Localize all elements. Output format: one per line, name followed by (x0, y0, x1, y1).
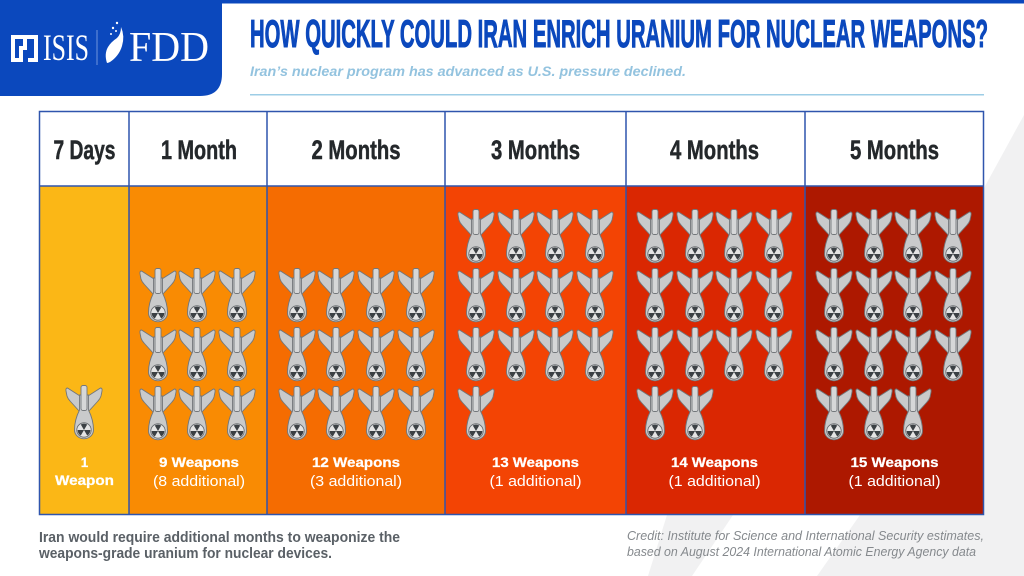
credit: Credit: Institute for Science and International Security estimates, (627, 529, 984, 543)
bombs: 13 weapons (458, 210, 613, 440)
header: 3 Months: 3 Months (491, 135, 580, 165)
bombs: 15 weapons (816, 210, 971, 440)
column: 1 Month (129, 111, 267, 515)
label: 15 Weapons (848, 455, 940, 490)
top rule (0, 0, 1024, 4)
label: 9 Weapons: (8 additional) (153, 474, 245, 490)
header: 5 Months: 5 Months (850, 135, 939, 165)
label: 15 Weapons: (1 additional) (848, 474, 940, 490)
logo: FDD: FDD (129, 25, 209, 71)
column: 7 Days (39, 111, 129, 515)
column: 2 Months (267, 111, 445, 515)
header: 7 Days: 7 Days (54, 135, 116, 165)
label: 1 Weapon: Weapon (55, 473, 114, 488)
label: 1 Weapon (55, 455, 114, 488)
footnote: weapons-grade uranium for nuclear devices. (38, 545, 332, 562)
label: 15 Weapons: 15 Weapons (850, 455, 938, 470)
label: 14 Weapons (668, 455, 760, 490)
label: 12 Weapons (310, 455, 402, 490)
label: 14 Weapons: (1 additional) (668, 474, 760, 490)
label: 9 Weapons: 9 Weapons (159, 455, 239, 470)
credit (627, 529, 984, 559)
header: 4 Months: 4 Months (670, 135, 759, 165)
bombs: 9 weapons (140, 268, 255, 440)
column: 3 Months (445, 111, 626, 515)
label: 13 Weapons: 13 Weapons (492, 455, 579, 470)
label: 1 Weapon: 1 (81, 455, 89, 470)
label: 14 Weapons: 14 Weapons (671, 455, 758, 470)
logo: ISIS (11, 28, 89, 69)
subtitle: Iran’s nuclear program has advanced as U.S. pressure declined. (250, 64, 686, 79)
header: 2 Months: 2 Months (312, 135, 400, 165)
credit: based on August 2024 International Atomic Energy Agency data (627, 545, 976, 559)
label: 13 Weapons (490, 455, 582, 490)
label: 12 Weapons: (3 additional) (310, 474, 402, 490)
header: 1 Month: 1 Month (161, 135, 237, 165)
column: 4 Months (626, 111, 805, 515)
bombs: 14 weapons (637, 210, 792, 440)
bombs: 12 weapons (279, 268, 434, 440)
label: 13 Weapons: (1 additional) (490, 474, 582, 490)
logo: ISIS: ISIS (43, 28, 89, 69)
column: 5 Months (805, 111, 984, 515)
logo panel (0, 0, 222, 96)
logo: FDD (106, 22, 209, 71)
footnote: Iran would require additional months to weaponize the (39, 529, 400, 546)
bombs: 1 weapon (66, 386, 102, 439)
label: 9 Weapons (153, 455, 245, 490)
footnote (38, 529, 400, 562)
label: 12 Weapons: 12 Weapons (312, 455, 400, 470)
background swoosh (648, 115, 1024, 576)
